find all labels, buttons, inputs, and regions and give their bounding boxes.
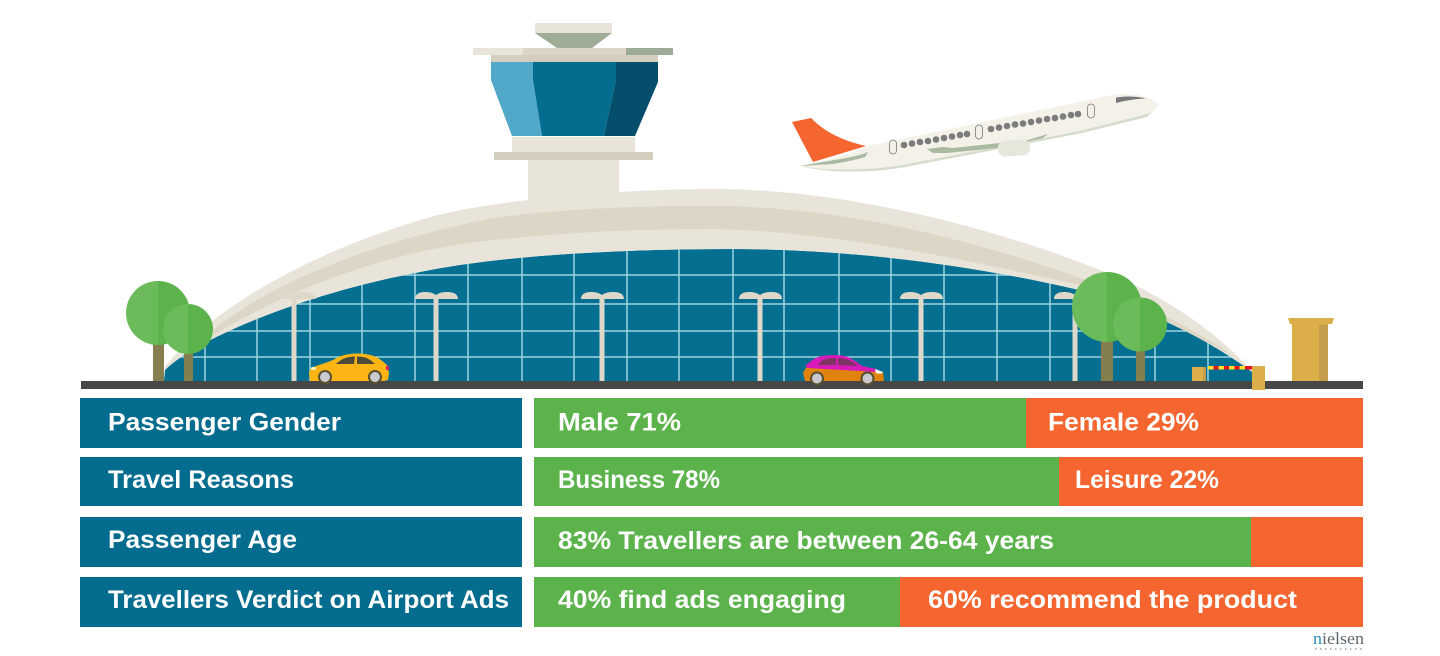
nielsen logo: nielsen <box>1313 629 1365 648</box>
row: verdict on airport ads <box>80 577 1363 627</box>
bar: find ads engaging: 40% find ads engaging <box>558 586 846 614</box>
airplane <box>792 94 1158 172</box>
plane tail fin <box>792 118 866 162</box>
magenta and orange car <box>803 355 884 386</box>
bar: female: Female 29% <box>1048 408 1199 436</box>
bar: recommend the product: 60% recommend the product <box>928 586 1298 614</box>
bar: recommend the product <box>900 577 1363 627</box>
trees right <box>1072 272 1167 381</box>
label: verdict on airport ads: Travellers Verdict on Airport Ads <box>108 586 509 614</box>
bar: travellers 26-64: 83% Travellers are between 26-64 years <box>558 527 1054 555</box>
label: travel reasons: Travel Reasons <box>108 466 294 494</box>
plane fuselage <box>800 94 1158 170</box>
yellow car <box>309 354 389 384</box>
plane doors <box>890 104 1094 154</box>
tail stabiliser <box>800 152 868 166</box>
label: passenger gender: Passenger Gender <box>108 408 341 436</box>
bar: business: Business 78% <box>558 466 720 494</box>
cockpit window <box>1116 96 1146 103</box>
bar: leisure: Leisure 22% <box>1075 466 1219 494</box>
label: travel reasons <box>80 457 522 506</box>
bar: female <box>1026 398 1363 448</box>
plane windows <box>901 111 1081 148</box>
bar: male: Male 71% <box>558 408 681 436</box>
label: passenger age <box>80 517 522 567</box>
street lamps <box>272 292 1097 381</box>
tower roof <box>473 23 673 62</box>
row: passenger age <box>80 517 1363 567</box>
gate building <box>1288 318 1334 381</box>
bar: business <box>534 457 1059 506</box>
control tower <box>473 23 673 210</box>
terminal dome roof <box>165 189 1253 372</box>
label: passenger age: Passenger Age <box>108 526 297 554</box>
label: verdict on airport ads <box>80 577 522 627</box>
row: passenger gender <box>80 398 1363 448</box>
security gate <box>1192 366 1265 390</box>
road <box>81 381 1363 389</box>
plane engine <box>997 139 1031 157</box>
trees left <box>126 281 213 381</box>
plane belly shadow <box>800 106 1158 172</box>
tower lower deck <box>494 137 653 160</box>
plane wing <box>927 134 1048 153</box>
label: passenger gender <box>80 398 522 448</box>
bar: remainder <box>1251 517 1363 567</box>
bar: male <box>534 398 1026 448</box>
row: travel reasons <box>80 457 1363 506</box>
bar: leisure <box>1059 457 1363 506</box>
bar: find ads engaging <box>534 577 900 627</box>
bar: travellers 26-64 <box>534 517 1251 567</box>
terminal glass facade <box>150 240 1260 381</box>
tower glass cab <box>491 62 658 136</box>
tower column <box>528 160 619 210</box>
